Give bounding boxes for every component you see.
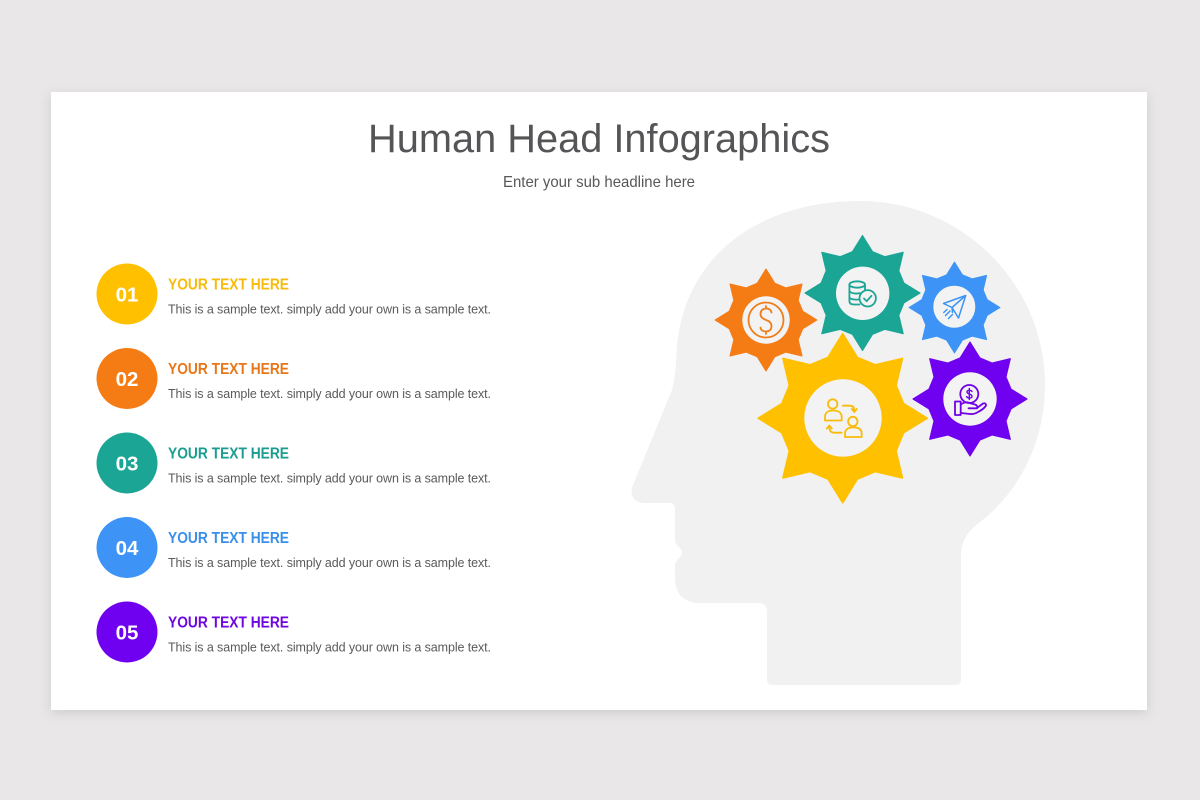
icon: hand holding coin bbox=[955, 385, 986, 415]
list item 04: 04 bbox=[116, 537, 139, 560]
list item 04 bbox=[96, 517, 491, 578]
list item 02: YOUR TEXT HERE bbox=[168, 361, 289, 378]
gear: orange dollar bbox=[715, 269, 817, 371]
list item 01 bbox=[96, 264, 491, 324]
gear: purple hand with coin bbox=[913, 342, 1027, 456]
list item 03: This is a sample text. simply add your own is a sample text. bbox=[168, 472, 491, 486]
list item 03: YOUR TEXT HERE bbox=[168, 446, 289, 462]
gear: yellow people exchange bbox=[758, 334, 927, 503]
icon: people exchange bbox=[825, 399, 862, 437]
list item 02: 02 bbox=[116, 368, 138, 391]
title: Human Head Infographics bbox=[368, 117, 830, 161]
list item 04: This is a sample text. simply add your own is a sample text. bbox=[168, 556, 491, 570]
list item 02 bbox=[96, 348, 491, 409]
gear: teal database bbox=[805, 236, 920, 350]
list item 01: YOUR TEXT HERE bbox=[168, 276, 289, 294]
list item 04: YOUR TEXT HERE bbox=[168, 530, 289, 547]
icon: database with check bbox=[849, 281, 876, 306]
icon: paper plane bbox=[944, 296, 966, 318]
list item 05 bbox=[96, 602, 491, 662]
panel: white slide bbox=[51, 92, 1147, 710]
list item 03 bbox=[96, 432, 491, 494]
subtitle: Enter your sub headline here bbox=[503, 174, 695, 191]
list item 01: This is a sample text. simply add your own is a sample text. bbox=[168, 302, 491, 316]
gear: blue paper plane bbox=[909, 262, 1000, 353]
icon: dollar coin bbox=[748, 302, 784, 338]
head silhouette bbox=[632, 201, 1045, 685]
list item 03: 03 bbox=[116, 452, 138, 476]
list item 01: 01 bbox=[116, 284, 138, 306]
list item 05: This is a sample text. simply add your own is a sample text. bbox=[168, 640, 491, 654]
list item 02: This is a sample text. simply add your own is a sample text. bbox=[168, 387, 491, 401]
list item 05: YOUR TEXT HERE bbox=[168, 614, 289, 632]
list item 05: 05 bbox=[116, 622, 138, 644]
